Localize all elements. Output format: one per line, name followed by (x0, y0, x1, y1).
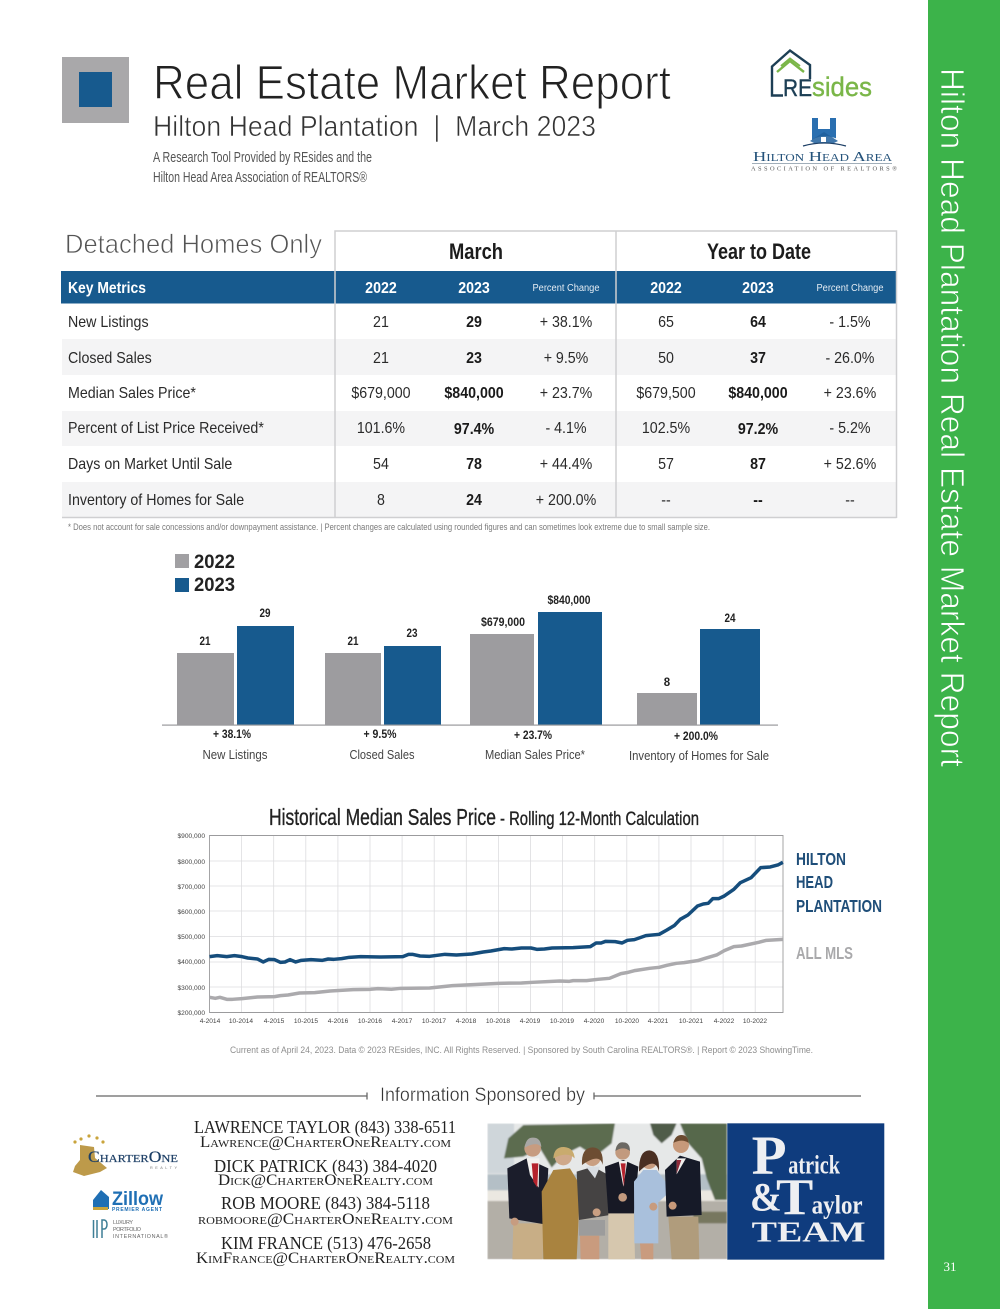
logo: Hilton Head Area Association of Realtors: ASSOCIATION OF REALTORS® (751, 166, 897, 172)
logo: Hilton Head Area Association of Realtors (751, 118, 897, 172)
row: Inventory of Homes for Sale: -- (661, 491, 671, 509)
series label: Hilton Head Plantation: HILTON (796, 849, 846, 869)
x axis labels: 10-2022 (743, 1018, 767, 1025)
column headers: Percent Change (532, 283, 600, 294)
y axis labels: $200,000 (177, 1010, 205, 1017)
x axis labels: 10-2014 (229, 1018, 253, 1025)
header title block (153, 57, 671, 186)
contact: Rob Moore: ROB MOORE (843) 384-5118 (221, 1193, 430, 1214)
bars: New Listings: New Listings (202, 747, 268, 762)
row: New Listings: 65 (658, 313, 674, 331)
row: Median Sales Price: $679,000 (351, 384, 411, 402)
period heading: Year to Date: Year to Date (707, 239, 811, 264)
intro text (153, 150, 372, 186)
row: Days on Market Until Sale: + 44.4% (540, 455, 592, 473)
person 1 (507, 1138, 548, 1259)
bars: Inventory of Homes for Sale: Inventory of Homes for Sale (629, 748, 769, 763)
logo: Hilton Head Area Association of Realtors: Hilton Head Area (753, 150, 893, 165)
y axis labels: $800,000 (177, 859, 205, 866)
sidebar title: Hilton Head Plantation Real Estate Market Report (934, 68, 971, 767)
row: Percent of List Price Received: - 5.2% (829, 419, 870, 437)
y axis labels: $300,000 (177, 985, 205, 992)
row: Median Sales Price: $679,500 (636, 384, 696, 402)
bar chart: 2022 vs 2023 (162, 595, 778, 763)
contact: Lawrence Taylor: Lawrence@CharterOneRealty.com (200, 1134, 451, 1151)
person 2 (542, 1147, 580, 1259)
bars: Inventory of Homes for Sale (629, 613, 769, 763)
contact: Rob Moore (198, 1193, 453, 1228)
x axis labels: 10-2016 (358, 1018, 382, 1025)
logo: CharterOne Realty: CharterOne (88, 1149, 178, 1166)
row: Days on Market Until Sale: Days on Market Until Sale (68, 455, 232, 473)
row: Percent of List Price Received: 97.2% (738, 420, 778, 438)
y axis labels: $700,000 (177, 884, 205, 891)
subtitle: Hilton Head Plantation | March 2023 (153, 111, 596, 143)
logo: REsides (772, 50, 872, 102)
row: Percent of List Price Received: Percent of List Price Received* (68, 419, 264, 437)
key metrics table (61, 231, 896, 518)
bars: Closed Sales: + 9.5% (364, 729, 396, 741)
row: New Listings: + 38.1% (540, 313, 592, 331)
column headers: Percent Change (816, 283, 884, 294)
person 4 (605, 1142, 638, 1259)
row: Median Sales Price: + 23.7% (540, 384, 592, 402)
row: Days on Market Until Sale: + 52.6% (824, 455, 876, 473)
bars: Median Sales Price: + 23.7% (514, 730, 552, 742)
row: New Listings (68, 313, 870, 331)
bars: New Listings: 21 (200, 636, 211, 648)
column headers: 2023 (458, 279, 490, 297)
row: Days on Market Until Sale: 57 (658, 455, 674, 473)
logo: Luxury Portfolio International (94, 1220, 168, 1240)
series label: Hilton Head Plantation: PLANTATION (796, 896, 882, 916)
bars: Closed Sales: Closed Sales (350, 747, 415, 762)
chart legend (175, 552, 235, 596)
page number: 31 (944, 1259, 956, 1274)
team photo illustration (487, 1123, 727, 1259)
logo: CharterOne Realty (73, 1134, 178, 1176)
row: Closed Sales: 23 (466, 349, 482, 367)
alternating row backgrounds (62, 339, 896, 517)
row: Closed Sales: 21 (373, 349, 389, 367)
x axis labels: 10-2015 (294, 1018, 318, 1025)
row: Percent of List Price Received: 101.6% (357, 419, 405, 437)
heading: Detached Homes Only: Detached Homes Only (65, 229, 322, 259)
table body rows (68, 313, 876, 509)
contact: Rob Moore: robmoore@CharterOneRealty.com (198, 1211, 453, 1228)
row: Median Sales Price: $840,000 (444, 384, 504, 402)
intro text: Hilton Head Area Association of REALTORS® (153, 170, 367, 186)
bars: New Listings: 29 (260, 608, 270, 620)
x axis labels (200, 1018, 767, 1025)
x axis labels: 4-2022 (714, 1018, 735, 1025)
contact list (194, 1117, 456, 1267)
heading: historical chart (269, 804, 699, 830)
line: Hilton Head Plantation (210, 862, 783, 962)
x axis labels: 4-2021 (648, 1018, 669, 1025)
row: New Listings: 64 (750, 313, 766, 331)
bars: Inventory of Homes for Sale: 8 (664, 677, 671, 689)
logo panel: Patrick & Taylor Team: P (752, 1124, 787, 1185)
x axis labels: 10-2018 (486, 1018, 510, 1025)
column headers: 2022 (650, 279, 682, 297)
row: Inventory of Homes for Sale: -- (753, 491, 763, 509)
bars: New Listings: + 38.1% (213, 729, 251, 741)
table frame lines (62, 231, 896, 518)
contact: Lawrence Taylor (194, 1117, 456, 1151)
heading: historical chart: - Rolling 12-Month Calculation (500, 809, 699, 830)
bars: Inventory of Homes for Sale: 24 (724, 613, 736, 625)
row: Inventory of Homes for Sale: 24 (466, 491, 483, 509)
period heading: March: March (449, 239, 503, 264)
bars: Median Sales Price (470, 595, 602, 762)
person 6 (665, 1135, 702, 1259)
x axis labels: 4-2020 (584, 1018, 605, 1025)
x axis labels: 10-2017 (422, 1018, 446, 1025)
column headers (68, 279, 884, 297)
contact: Kim France: KimFrance@CharterOneRealty.com (196, 1250, 455, 1267)
bars: Median Sales Price: Median Sales Price* (485, 747, 585, 762)
row: Days on Market Until Sale (68, 455, 876, 473)
row: New Listings: 29 (466, 313, 482, 331)
column headers: 2023 (742, 279, 774, 297)
x axis labels: 4-2014 (200, 1018, 221, 1025)
row: Closed Sales: 37 (750, 349, 766, 367)
row: Median Sales Price (68, 384, 876, 402)
row: Inventory of Homes for Sale: -- (845, 491, 855, 509)
logo: REsides: sides (812, 72, 872, 102)
bars: Closed Sales: 23 (406, 628, 418, 640)
contact: Kim France (196, 1233, 455, 1267)
contact: Dick Patrick: Dick@CharterOneRealty.com (218, 1172, 433, 1189)
icon: square report mark (62, 57, 129, 123)
row: Median Sales Price: + 23.6% (824, 384, 876, 402)
line chart: historical median sales price (177, 833, 783, 1025)
person 3 (577, 1147, 610, 1259)
row: New Listings: - 1.5% (829, 313, 870, 331)
x axis labels: 4-2017 (392, 1018, 413, 1025)
x axis labels: 4-2016 (328, 1018, 349, 1025)
y axis labels: $900,000 (177, 833, 205, 840)
x axis labels: 10-2020 (615, 1018, 639, 1025)
logo: Luxury Portfolio International: PORTFOLIO (113, 1227, 141, 1233)
contact: Lawrence Taylor: LAWRENCE TAYLOR (843) 338-6511 (194, 1117, 456, 1138)
row: Closed Sales: + 9.5% (544, 349, 588, 367)
row: Percent of List Price Received: 102.5% (642, 419, 690, 437)
column headers: Key Metrics (68, 280, 146, 297)
logo panel: Patrick & Taylor Team: T (776, 1169, 813, 1226)
row: Percent of List Price Received: - 4.1% (545, 419, 587, 437)
row: Days on Market Until Sale: 78 (466, 455, 482, 473)
data source note: Current as of April 24, 2023. Data © 2023 REsides, INC. All Rights Reserved. | Sponsored by South Carolina REALTORS®. | Report © 2023 ShowingTime. (230, 1045, 813, 1056)
row: Percent of List Price Received: 97.4% (454, 420, 494, 438)
beach background (487, 1123, 727, 1259)
bars: Closed Sales (325, 628, 441, 762)
series label: Hilton Head Plantation: HEAD (796, 872, 833, 892)
sidebar: green vertical banner (928, 0, 1000, 1309)
logo panel: Patrick & Taylor Team (727, 1123, 884, 1260)
sponsor divider heading (96, 1085, 861, 1106)
y axis labels: $600,000 (177, 909, 205, 916)
x axis labels: 10-2021 (679, 1018, 703, 1025)
series label: Hilton Head Plantation (796, 849, 882, 916)
bars: Median Sales Price: $679,000 (481, 617, 525, 629)
line: all MLS (210, 939, 783, 999)
sponsor divider heading: Information Sponsored by (380, 1085, 585, 1106)
row: New Listings: New Listings (68, 313, 149, 331)
x axis labels: 4-2019 (520, 1018, 541, 1025)
logo: Zillow Premier Agent: Zillow (112, 1189, 163, 1210)
x axis labels: 4-2018 (456, 1018, 477, 1025)
logo panel: Patrick & Taylor Team: & (750, 1174, 782, 1219)
bars: New Listings (177, 608, 294, 762)
logo panel: Patrick & Taylor Team: TEAM (752, 1218, 866, 1249)
contact: Kim France: KIM FRANCE (513) 476-2658 (221, 1233, 431, 1254)
bars: Median Sales Price: $840,000 (548, 595, 590, 607)
chart legend: 2023 (194, 575, 235, 596)
row: Percent of List Price Received (68, 419, 870, 438)
row: Inventory of Homes for Sale: 8 (377, 491, 385, 509)
row: Median Sales Price: Median Sales Price* (68, 384, 196, 402)
row: Days on Market Until Sale: 87 (750, 455, 766, 473)
logo panel: Patrick & Taylor Team: aylor (812, 1190, 863, 1220)
row: Closed Sales (68, 349, 874, 367)
chart legend: 2022 (194, 552, 235, 573)
y axis labels: $400,000 (177, 959, 205, 966)
logo: Luxury Portfolio International: LUXURY (113, 1220, 133, 1226)
table footnote: * Does not account for sale concessions and/or downpayment assistance. | Percent changes are calculated using rounded figures and can sometimes look extreme due to small sample size. (68, 522, 710, 532)
logo: Zillow Premier Agent: PREMIER AGENT (112, 1207, 162, 1213)
intro text: A Research Tool Provided by REsides and the (153, 150, 372, 166)
row: Inventory of Homes for Sale: Inventory of Homes for Sale (68, 491, 244, 509)
bars: Inventory of Homes for Sale: + 200.0% (674, 731, 718, 743)
y axis labels: $500,000 (177, 934, 205, 941)
row: New Listings: 21 (373, 313, 389, 331)
series label: All MLS: ALL MLS (796, 943, 853, 963)
person 5 (634, 1150, 672, 1259)
row: Closed Sales: 50 (658, 349, 674, 367)
logo: Zillow Premier Agent (93, 1189, 163, 1213)
row: Inventory of Homes for Sale: + 200.0% (536, 491, 596, 509)
contact: Dick Patrick (214, 1156, 437, 1189)
row: Days on Market Until Sale: 54 (373, 455, 389, 473)
table header band (61, 271, 896, 304)
row: Closed Sales: - 26.0% (825, 349, 874, 367)
x axis labels: 4-2015 (264, 1018, 285, 1025)
logo: REsides: RE (783, 75, 812, 102)
row: Median Sales Price: $840,000 (728, 384, 788, 402)
row: Inventory of Homes for Sale (68, 491, 855, 509)
x axis labels: 10-2019 (550, 1018, 574, 1025)
column headers: 2022 (365, 279, 397, 297)
y axis labels (177, 833, 205, 1017)
logo panel: Patrick & Taylor Team: atrick (788, 1149, 840, 1179)
heading: historical chart: Historical Median Sales Price (269, 804, 496, 830)
contact: Dick Patrick: DICK PATRICK (843) 384-4020 (214, 1156, 437, 1177)
title: Real Estate Market Report (153, 57, 671, 110)
logo: Luxury Portfolio International: INTERNATIONAL® (113, 1233, 168, 1240)
row: Closed Sales: Closed Sales (68, 349, 152, 367)
bars: Closed Sales: 21 (348, 636, 359, 648)
logo: CharterOne Realty: REALTY (150, 1166, 177, 1170)
